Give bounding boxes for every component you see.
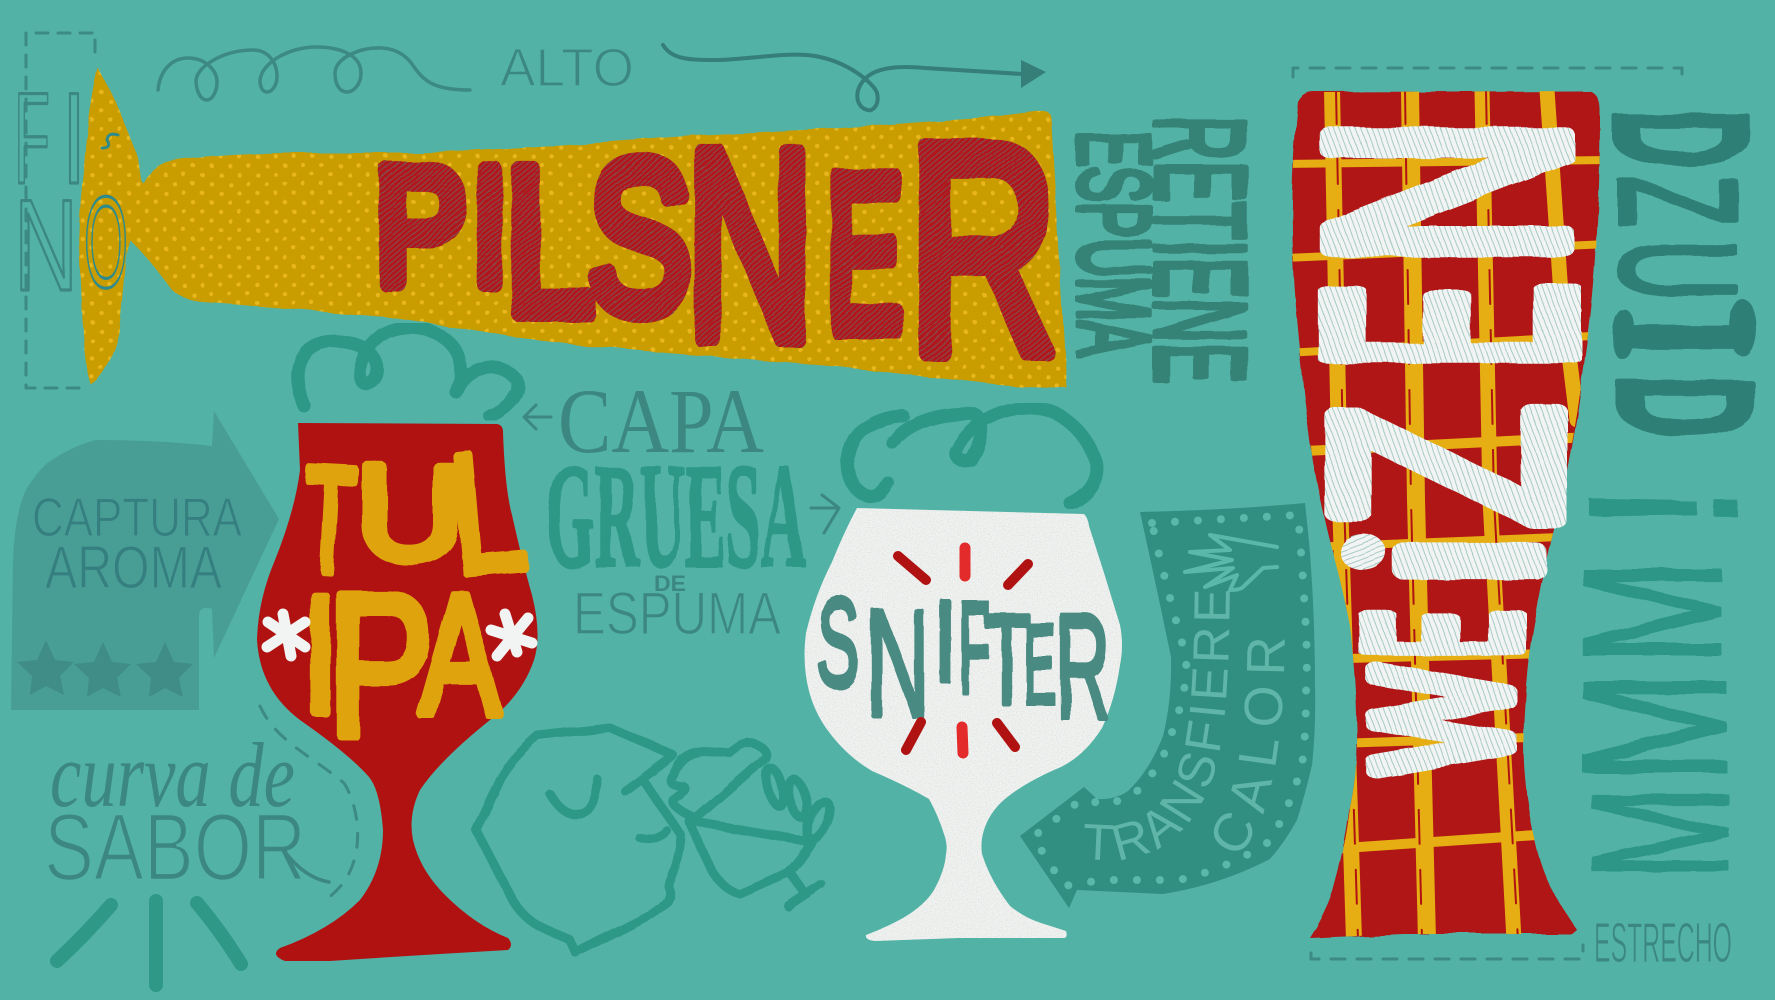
snifter glass panel (804, 508, 1122, 941)
dashed bracket: weizen bottom (1311, 945, 1583, 959)
arrow: alto right (663, 45, 1046, 110)
face outline (476, 728, 681, 953)
text: RETIENE (1128, 116, 1271, 384)
glass silhouette: weizen (1292, 91, 1600, 938)
heading: SNIFTER: I (935, 577, 957, 707)
side text: MMM!: M (1541, 559, 1762, 665)
label: captura aroma: CAPTURA (32, 486, 242, 548)
three stars (17, 640, 193, 697)
pilsner glass panel (79, 68, 1067, 415)
glass silhouette: snifter (804, 508, 1122, 941)
heading: PILSNER (375, 83, 1058, 415)
heading: TUL IPA: U (356, 439, 464, 588)
callout arrow: captura aroma: AROMA (45, 534, 222, 601)
heading: WEIZEN: Z (1266, 404, 1624, 528)
rays: bright red (962, 548, 965, 753)
side text: MMM! (1540, 486, 1775, 880)
side text: rotated word (1575, 110, 1775, 438)
tulip glass panel (257, 415, 538, 961)
callout arrow: transfiere calor (1020, 503, 1316, 908)
dashed bracket: fino (26, 33, 95, 388)
heading: WEIZEN: E (1324, 610, 1560, 658)
side text: MMM!: M (1540, 671, 1769, 783)
glass silhouette: pilsner (79, 68, 1067, 388)
DE: DE (654, 571, 686, 596)
heading: TUL IPA: T (299, 437, 359, 603)
label: curva de sabor (44, 724, 329, 901)
rays: flavor (57, 901, 241, 985)
callout arrow: transfiere calor: TRANSFIERE (1084, 591, 1230, 860)
label: FINO (14, 65, 128, 318)
heading: SNIFTER: N (866, 579, 930, 749)
decorative swirl: alto left (158, 47, 470, 100)
arrow shape (1020, 503, 1315, 908)
small beer glass (689, 821, 821, 906)
hand and foam (671, 743, 766, 819)
heading: WEIZEN: W (1336, 668, 1546, 772)
heading: SNIFTER: T (983, 589, 1031, 732)
mouth (640, 830, 666, 838)
side text: MMM!: M (1551, 786, 1770, 880)
text: GRUESA (546, 433, 806, 599)
heading: SNIFTER (816, 572, 1110, 750)
side text: rotated word: U (1586, 240, 1770, 300)
heading: WEIZEN: E (1252, 282, 1646, 370)
icon: hand (1185, 535, 1277, 590)
dotted border (1033, 515, 1307, 886)
ESPUMA: ESPUMA (573, 580, 781, 647)
CAPA: CAPA (558, 370, 764, 472)
plaid stripes (1285, 90, 1610, 940)
dashed curve: flavor (260, 706, 358, 903)
heading: SNIFTER: E (1023, 602, 1057, 728)
callout arrow: captura aroma (11, 411, 279, 710)
foam swirl: snifter (847, 408, 1098, 504)
text: RETIENE ESPUMA (1057, 116, 1271, 384)
heading: SNIFTER: R (1056, 585, 1110, 750)
side text: MMM!: ! (1546, 486, 1775, 530)
heading: PILSNER: R (908, 83, 1058, 415)
heading: PILSNER: I (472, 135, 507, 318)
heading: TUL IPA: A (420, 559, 500, 751)
label: FINO: F (14, 65, 50, 211)
label: FINO: N (14, 172, 78, 318)
text: capa gruesa de espuma (524, 370, 839, 647)
label: transfiere (1082, 530, 1230, 860)
label: calor (1238, 610, 1285, 858)
heading: TUL IPA: P (327, 552, 435, 779)
arrow to tulip foam (524, 405, 551, 429)
heading: PILSNER: L (505, 126, 595, 358)
closed eye (551, 779, 597, 814)
label: FINO: I (62, 65, 86, 211)
text: O (84, 169, 128, 315)
label: curva de sabor: curva de (50, 724, 295, 826)
glass silhouette: tulip (257, 423, 538, 961)
foam swirl: tulip (298, 328, 518, 416)
heading: TUL IPA: L (442, 415, 533, 610)
callout arrow: transfiere calor: CALOR (1214, 639, 1285, 851)
dashed bracket: weizen top (1293, 68, 1682, 77)
side text: rotated word: Z (1584, 176, 1772, 226)
text: RETIENE ESPUMA: ESPUMA (1057, 131, 1171, 357)
heading: PILSNER: E (826, 130, 904, 378)
rays: dark red (898, 556, 1028, 750)
heading: WEIZEN: I (1361, 536, 1577, 586)
heading: SNIFTER: S (816, 572, 860, 713)
face drinking illustration (476, 728, 834, 953)
heading: TUL IPA (299, 415, 533, 779)
heading: WEIZEN: N (1257, 117, 1636, 267)
icon: asterisk left (267, 614, 305, 656)
label: ALTO: ALTO (500, 38, 634, 98)
arrow shape (11, 411, 279, 710)
heading: TUL IPA: I (303, 562, 338, 748)
heading: SNIFTER: F (958, 574, 990, 720)
heading: PILSNER: N (686, 95, 814, 396)
icon: asterisk right (491, 614, 532, 656)
arrow to snifter foam (811, 495, 839, 533)
heading: PILSNER: S (588, 116, 692, 358)
label: curva de sabor: SABOR (44, 794, 306, 901)
heading: WEIZEN (1252, 117, 1646, 772)
weizen glass panel (1292, 90, 1600, 938)
heading: PILSNER: P (375, 135, 467, 318)
